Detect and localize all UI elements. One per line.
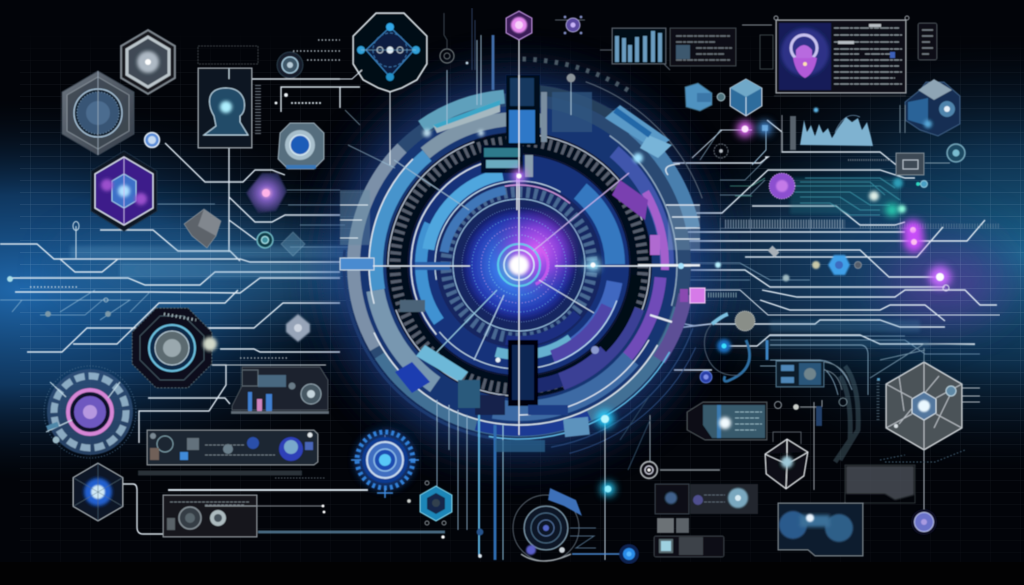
left gear hub [132,308,217,388]
panels: lower small cards [654,484,758,557]
icon: cyan hexagon badge [407,481,452,525]
panel: fading cables [835,366,858,462]
icon: large circuit hexagon [886,362,980,450]
icon: large gray hexagon [62,71,134,155]
icon: diamond rock [184,209,221,248]
top circuit branches [340,8,670,168]
dial block overlays [340,75,672,437]
icon: pink square chip [680,288,738,303]
icon: blue hexagon node [828,255,862,275]
blue ring [411,157,627,373]
icon: purple orb [769,173,795,199]
icon: purple hexagon [91,151,157,231]
icon: wireframe cube [765,432,808,489]
hexagon top wires and pin [870,344,975,535]
panel: dashboard strip [138,430,325,478]
central cross lines [373,35,700,560]
icon: pink and blue nodes [714,121,772,158]
target ring with wire [620,395,658,478]
left ring planet [44,366,136,458]
icon: teal ring node [257,232,273,248]
panel: gray circuit map [845,465,915,503]
icon: top ring node [277,52,303,78]
icon: silver hexagon [121,30,175,94]
node row with wire [774,400,822,490]
glowing core nebula [461,205,583,323]
left circuit traces [0,79,445,534]
right circuit traces [660,120,1000,470]
right edge panel bands [340,164,700,250]
panel: face monitor [774,16,909,96]
glow nodes on dial [423,129,684,362]
icon: blue gear node [351,430,419,498]
icon: blue cube small [730,79,762,116]
icon: blue lens device [278,123,324,169]
icon: small ring node [144,132,160,148]
icon: cyan hub with curve [700,311,767,383]
icon: bottom-center gear [513,488,596,561]
outer band arcs [341,87,697,443]
radial spokes [394,125,629,360]
top dotted data marks [274,40,340,104]
cyan glow connectors [572,410,639,564]
icon: top pink hexagon [506,11,532,40]
icon: top spark node [564,16,582,34]
icon: faint left diamond [281,232,305,256]
icon: top octagon network [353,13,427,165]
icon: cyan device [685,83,725,111]
icon: phone panel [918,23,937,60]
icon: left diamond node [286,314,310,342]
central radial dial [313,59,725,471]
panel: mini chart bars [612,25,773,69]
tick ring [388,134,650,396]
panel: glowing monitor [687,402,767,440]
icon: lower left hexagon [73,463,123,521]
panel: blue swirl [778,503,863,556]
icon: right hex cube cluster [905,79,960,136]
inner ring [439,185,599,345]
spectrum chart [782,105,905,152]
icon: nebula blob [246,173,287,213]
panel: head profile [198,46,258,148]
panel: small chip and gear [848,144,965,175]
faint outer arcs [313,59,725,471]
middle panel ring [361,107,677,423]
panel: blue chip modules [776,361,850,390]
panel: chart and gears [212,358,329,414]
glow points right [715,178,951,291]
panel: lower gauges [163,495,326,537]
